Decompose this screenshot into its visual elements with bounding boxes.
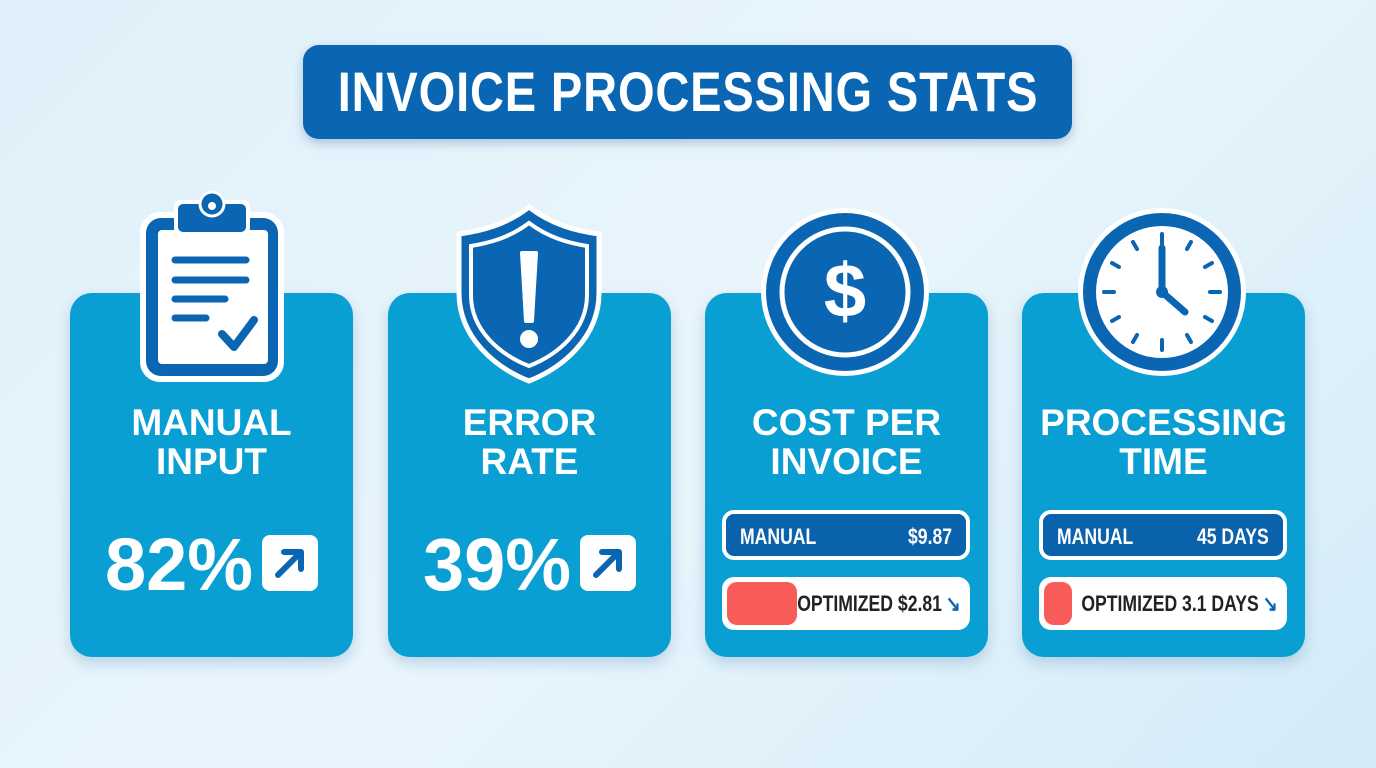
- icon: clipboard: [140, 190, 284, 382]
- heading: manual input: MANUAL: [131, 402, 292, 443]
- panel: error rate: [388, 293, 671, 657]
- heading: error rate: ERROR: [463, 402, 596, 443]
- bar: manual cost: [722, 510, 970, 560]
- bar: manual time: MANUAL: [1057, 524, 1133, 549]
- heading: cost per invoice: COST PER: [752, 402, 941, 443]
- icon: dollar coin: [761, 208, 929, 376]
- panel: processing time: [1022, 293, 1305, 657]
- icon: up arrow: [580, 535, 636, 591]
- bar: optimized time: ↘: [1262, 591, 1277, 616]
- heading: cost per invoice: [752, 402, 941, 482]
- panel: cost per invoice: [705, 293, 988, 657]
- bar: optimized cost: ↘: [945, 591, 960, 616]
- bar: manual cost: $9.87: [908, 524, 952, 549]
- bar: optimized time: OPTIMIZED 3.1 DAYS: [1082, 591, 1259, 616]
- heading: error rate: RATE: [480, 441, 578, 482]
- heading: manual input: [131, 402, 292, 482]
- bar: optimized cost: [722, 577, 970, 630]
- title: [303, 45, 1072, 139]
- bar: optimized cost: OPTIMIZED $2.81: [797, 591, 942, 616]
- title: INVOICE PROCESSING STATS: [337, 60, 1038, 123]
- icon: dollar coin: $: [824, 249, 866, 334]
- heading: processing time: PROCESSING: [1040, 402, 1287, 443]
- icon: clock: [1078, 208, 1246, 376]
- icon: shield: [456, 204, 602, 384]
- stat: 82%: 82%: [105, 523, 253, 606]
- heading: manual input: INPUT: [156, 441, 267, 482]
- heading: error rate: [463, 402, 596, 482]
- icon: up arrow: [262, 535, 318, 591]
- heading: cost per invoice: INVOICE: [770, 441, 923, 482]
- panel: manual input: [70, 293, 353, 657]
- bar: manual cost: MANUAL: [740, 524, 816, 549]
- bar: manual time: 45 DAYS: [1197, 524, 1269, 549]
- bar: manual time: [1039, 510, 1287, 560]
- heading: processing time: [1040, 402, 1287, 482]
- heading: processing time: TIME: [1119, 441, 1208, 482]
- bar: optimized time: [1039, 577, 1287, 630]
- stat: 39%: 39%: [423, 523, 571, 606]
